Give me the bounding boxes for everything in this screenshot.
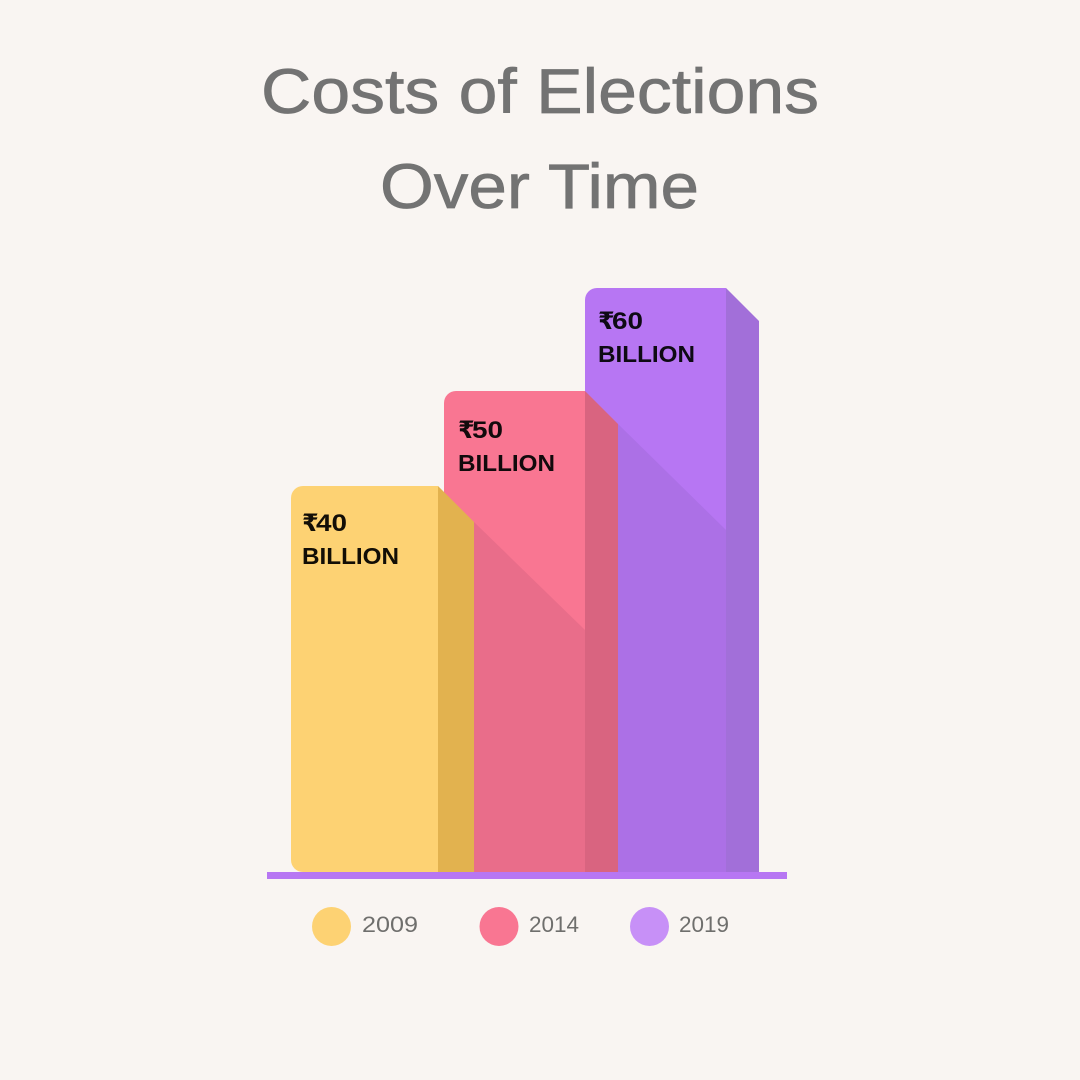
legend [312,907,729,946]
legend item: 2009 [312,907,418,946]
title: Over Time [380,152,699,222]
baseline [267,872,787,879]
title [261,57,819,222]
label: 40 billion [302,510,399,569]
bar: 2014 [444,391,618,872]
title: Costs of Elections [261,57,819,127]
label: 50 billion: 50 [472,417,503,444]
legend item: 2009: 2009 [362,912,418,937]
legend item: 2019 [630,907,729,946]
label: 60 billion [598,308,695,367]
bar chart [267,288,787,879]
bar: 2019 [585,288,759,872]
label: 60 billion: BILLION [598,341,695,367]
label: 50 billion: BILLION [458,450,555,476]
label: 40 billion: ₹ [302,510,319,537]
label: 50 billion: ₹ [458,417,475,444]
legend item: 2014 [480,907,579,946]
label: 50 billion [458,417,555,476]
label: 60 billion: 60 [612,308,643,335]
bar: 2009 [291,486,474,872]
label: 40 billion: BILLION [302,543,399,569]
legend item: 2019: 2019 [679,912,729,937]
label: 60 billion: ₹ [598,308,615,335]
legend item: 2014: 2014 [529,912,579,937]
label: 40 billion: 40 [316,510,347,537]
